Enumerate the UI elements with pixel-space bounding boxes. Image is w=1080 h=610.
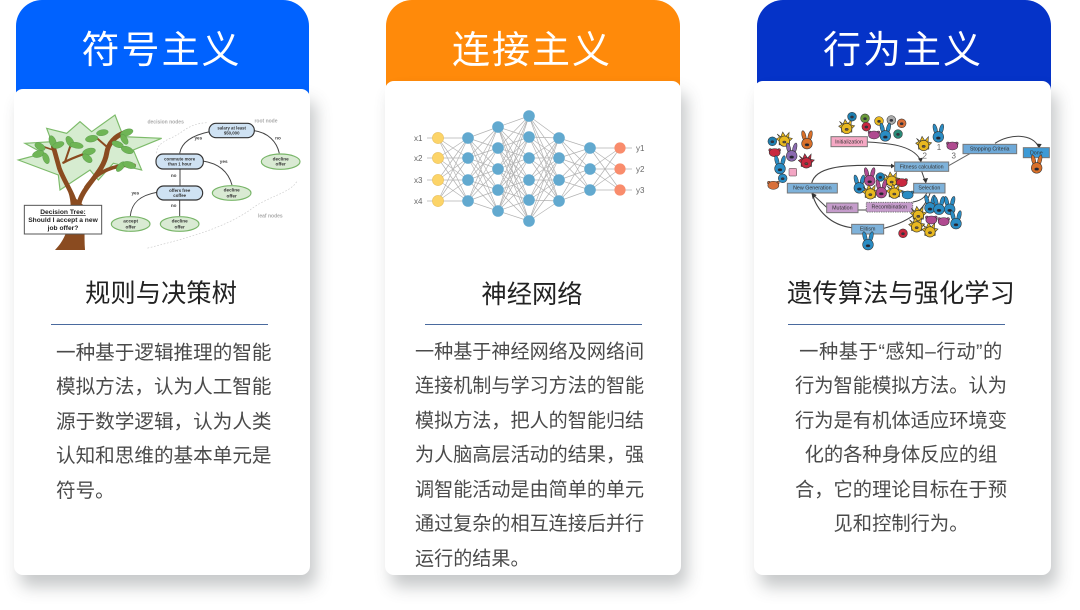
leaf node labels: offer [275,162,286,167]
region labels: decision nodes [147,120,184,126]
panel: behaviorism [752,0,1065,595]
output labels: y3 [636,186,645,195]
subheading: genetic algorithms and reinforcement learning: 遗传算法与强化学习 [787,280,1015,308]
branch labels: yes [194,136,203,141]
divider [51,324,268,325]
decision node: commute more [164,156,196,161]
input labels [414,134,423,206]
text: behaviorism description: 一种基于“感知–行动”的 [799,342,1003,363]
output labels [636,144,645,195]
process labels: Mutation [832,205,853,211]
text: connectionism description: 一种基于神经网络及网络间 [415,342,644,363]
text: connectionism description [415,341,644,570]
branch labels: no [171,203,177,208]
branch labels [131,135,281,208]
root node: $50,000 [224,131,240,136]
header: orange tab [386,0,680,110]
network connections [427,116,632,221]
diagram: genetic algorithm [767,112,1050,250]
process labels: Elitism [860,227,876,233]
output nodes [614,142,626,196]
text: connectionism description: 运行的结果。 [415,549,530,570]
text: symbolism description: 认知和思维的基本单元是 [56,445,272,467]
tree canopy [18,115,162,190]
root node: salary at least [217,126,247,131]
text: connectionism description: 调智能活动是由简单的单元 [415,480,644,501]
text: symbolism description: 符号。 [56,480,115,502]
text: symbolism description: 模拟方法，认为人工智能 [56,376,272,398]
diagram: decision tree [16,114,301,250]
card: connectionism [385,81,681,575]
output labels: y1 [636,144,645,153]
card: behaviorism [754,81,1051,575]
tree caption box: Should I accept a new [28,217,99,224]
region labels [147,118,283,219]
tree leaves [32,127,137,173]
heading: behaviorism: 行为主义 [823,30,983,72]
text: behaviorism description: 行为智能模拟方法。认为 [795,376,1007,397]
region labels: root node [254,118,278,124]
branch labels: no [275,135,281,140]
process labels [793,139,1043,233]
text: behaviorism description [795,342,1007,535]
leaf node labels: offer [226,194,237,199]
text: behaviorism description: 见和控制行为。 [834,514,968,535]
decision node: than 1 hour [168,162,192,167]
process labels: Fitness calculation [900,164,944,170]
card: symbolism [14,89,310,575]
input labels: x4 [414,197,423,206]
arrowheads [811,144,1042,199]
region labels: leaf nodes [258,213,283,219]
flow arrows [812,136,1039,228]
leaf node labels: accept [123,219,138,224]
process labels: Initialization [835,139,863,145]
process labels: Stopping Criteria [970,147,1010,153]
text: connectionism description: 通过复杂的相互连接后并行 [415,514,644,535]
decision node [157,186,203,200]
process labels: Recombination [872,205,907,211]
ranking numbers: 2 [922,151,927,160]
flow arrows [130,131,279,216]
input labels: x2 [414,154,423,163]
input labels: x3 [414,176,423,185]
process labels: Done [1030,150,1043,156]
panel: symbolism [12,0,324,595]
root node [209,123,254,138]
decision node: coffee [173,193,187,198]
text: connectionism description: 连接机制与学习方法的智能 [415,376,644,397]
leaf node labels: decline [273,156,289,161]
text: connectionism description: 为人脑高层活动的结果，强 [415,445,644,466]
divider [788,324,1005,325]
leaf node labels: decline [224,188,240,193]
text: symbolism description [56,342,272,502]
decision node: offers free [169,188,191,193]
leaf node labels: decline [172,219,188,224]
process labels: New Generation [793,186,832,192]
text: behaviorism description: 化的各种身体反应的组 [805,445,997,466]
process labels: Selection [918,186,940,192]
text: behaviorism description: 合，它的理论目标在于预 [795,480,1007,501]
subheading: neural networks: 神经网络 [481,281,583,309]
heading: connectionism: 连接主义 [452,30,612,72]
process boxes [787,137,1049,234]
population critters [767,112,1043,250]
output labels: y2 [636,165,645,174]
ranking numbers [922,143,956,160]
decision node [156,154,203,169]
hidden nodes [462,110,596,227]
subheading: rules and decision trees: 规则与决策树 [85,280,237,308]
panel: connectionism [383,0,695,595]
ranking numbers: 3 [951,151,956,160]
heading: symbolism: 符号主义 [81,30,242,72]
leaf node labels: offer [125,224,136,229]
dashed region outlines [147,123,297,248]
tree trunk [43,133,134,250]
ranking numbers: 1 [937,143,942,152]
leaf node labels: offer [174,224,185,229]
header: blue tab [16,0,309,110]
input nodes [432,132,444,207]
branch labels: no [171,173,177,178]
text: symbolism description: 源于数学逻辑，认为人类 [56,411,272,433]
leaf nodes [111,154,300,231]
tree caption box: Decision Tree: [40,209,86,216]
input labels: x1 [414,134,423,143]
text: symbolism description: 一种基于逻辑推理的智能 [56,342,272,364]
tree caption box [24,205,102,234]
text: connectionism description: 模拟方法，把人的智能归结 [415,411,644,432]
header: dark blue tab [757,0,1051,110]
text: behaviorism description: 行为是有机体适应环境变 [795,411,1007,432]
branch labels: yes [131,191,140,196]
leaf node labels [123,156,289,229]
branch labels: yes [220,159,228,164]
tree caption box: job offer? [47,225,78,232]
divider [425,324,642,325]
